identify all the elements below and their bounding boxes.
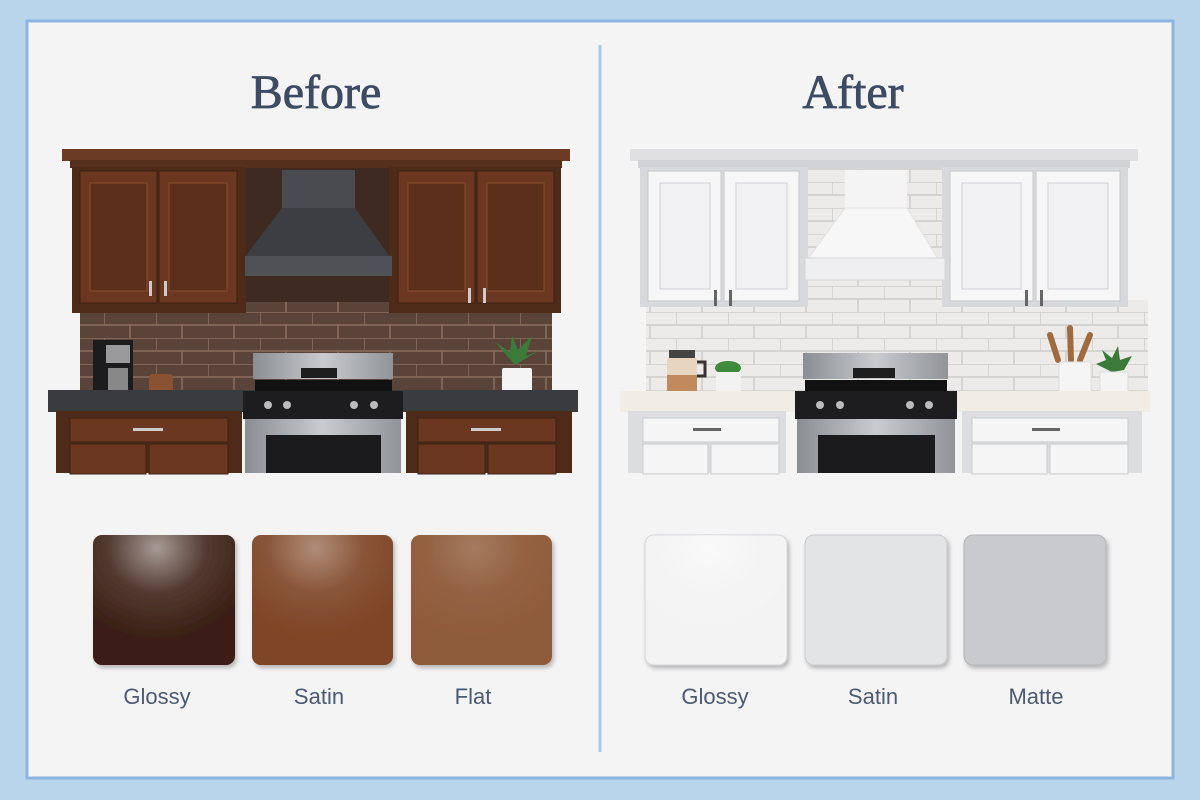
countertop <box>620 391 1150 412</box>
upper cabinets right <box>942 167 1128 307</box>
labels <box>123 684 1064 709</box>
swatch: flat wood <box>411 535 552 665</box>
hood <box>245 170 392 276</box>
labels: Satin <box>294 684 344 709</box>
labels: Flat <box>455 684 491 709</box>
plant <box>495 335 540 394</box>
title: After: After <box>802 66 904 119</box>
upper cabinets left <box>72 167 246 313</box>
divider <box>598 45 602 752</box>
title: Before: Before <box>251 66 381 119</box>
upper cabinets right <box>389 167 561 313</box>
labels: Satin <box>848 684 898 709</box>
small plant <box>715 361 741 392</box>
countertop <box>48 390 578 412</box>
stove <box>243 353 403 473</box>
hood <box>805 170 945 280</box>
swatch: matte gray <box>964 535 1106 665</box>
swatch: satin white <box>805 535 947 665</box>
coffee maker <box>93 340 133 396</box>
swatch: glossy white <box>645 535 787 665</box>
upper cabinets left <box>640 167 808 307</box>
kitchen: after <box>620 149 1150 474</box>
lower cabinets <box>628 411 1142 474</box>
lower cabinets <box>56 411 572 474</box>
utensil holder <box>1050 328 1091 394</box>
kettle <box>667 350 705 393</box>
kitchen: before <box>48 149 578 474</box>
labels: Glossy <box>123 684 191 709</box>
plant right <box>1096 346 1132 394</box>
labels: Matte <box>1008 684 1064 709</box>
labels: Glossy <box>681 684 749 709</box>
swatch: glossy dark wood <box>93 535 235 665</box>
canister <box>149 374 173 398</box>
swatch: satin wood <box>252 535 393 665</box>
stove <box>795 353 957 473</box>
